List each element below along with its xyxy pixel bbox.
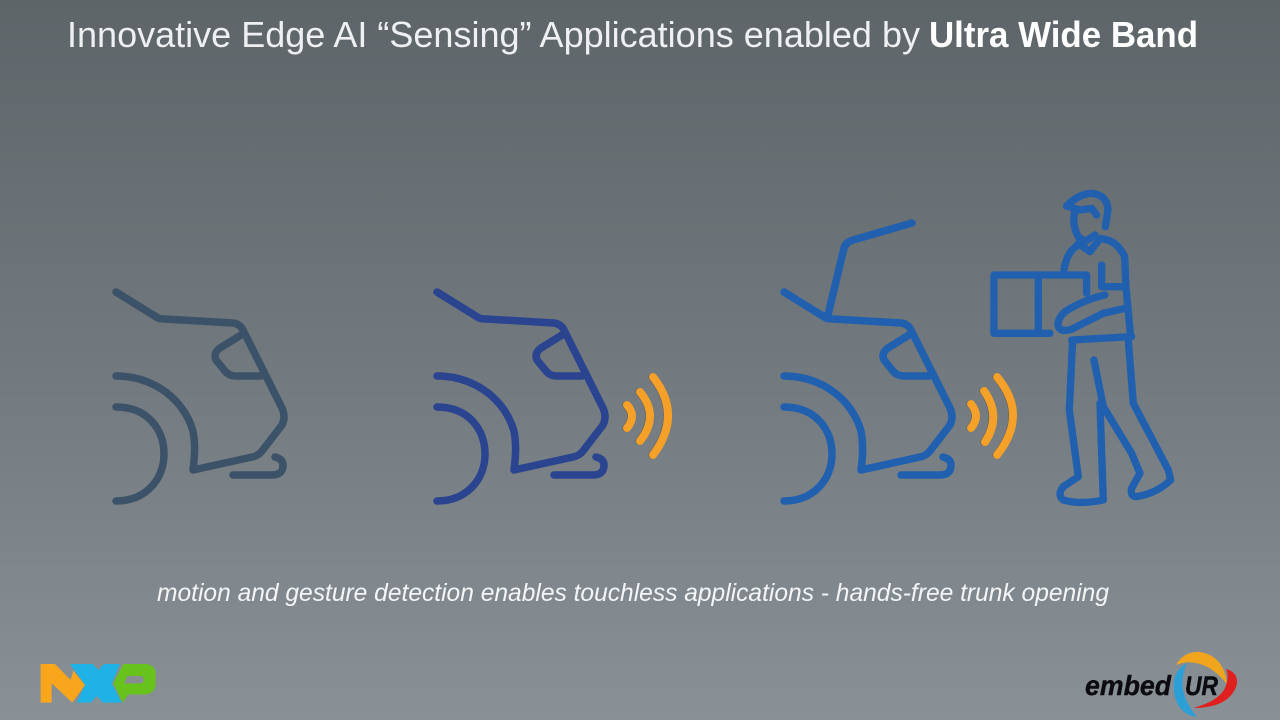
- caption: motion and gesture detection enables touchless applications - hands-free trunk opening: [157, 579, 1109, 607]
- logo: NXP: [41, 664, 156, 703]
- logo: embedUR: [1085, 652, 1237, 717]
- icon: car with open trunk: [784, 223, 952, 501]
- icon: UWB signal waves, car 2: [626, 377, 668, 455]
- logo: embedUR: embed: [1085, 670, 1172, 701]
- icon: closed car rear, sensing: [437, 292, 605, 501]
- icon: UWB signal waves, car 3: [970, 377, 1013, 455]
- icon: closed car rear, idle: [116, 292, 284, 501]
- title: Ultra Wide Band: [929, 14, 1198, 55]
- logo: embedUR: UR: [1185, 671, 1218, 701]
- title: Innovative Edge AI “Sensing” Applications enabled by: [67, 14, 920, 55]
- icon: person carrying a box: [994, 193, 1171, 502]
